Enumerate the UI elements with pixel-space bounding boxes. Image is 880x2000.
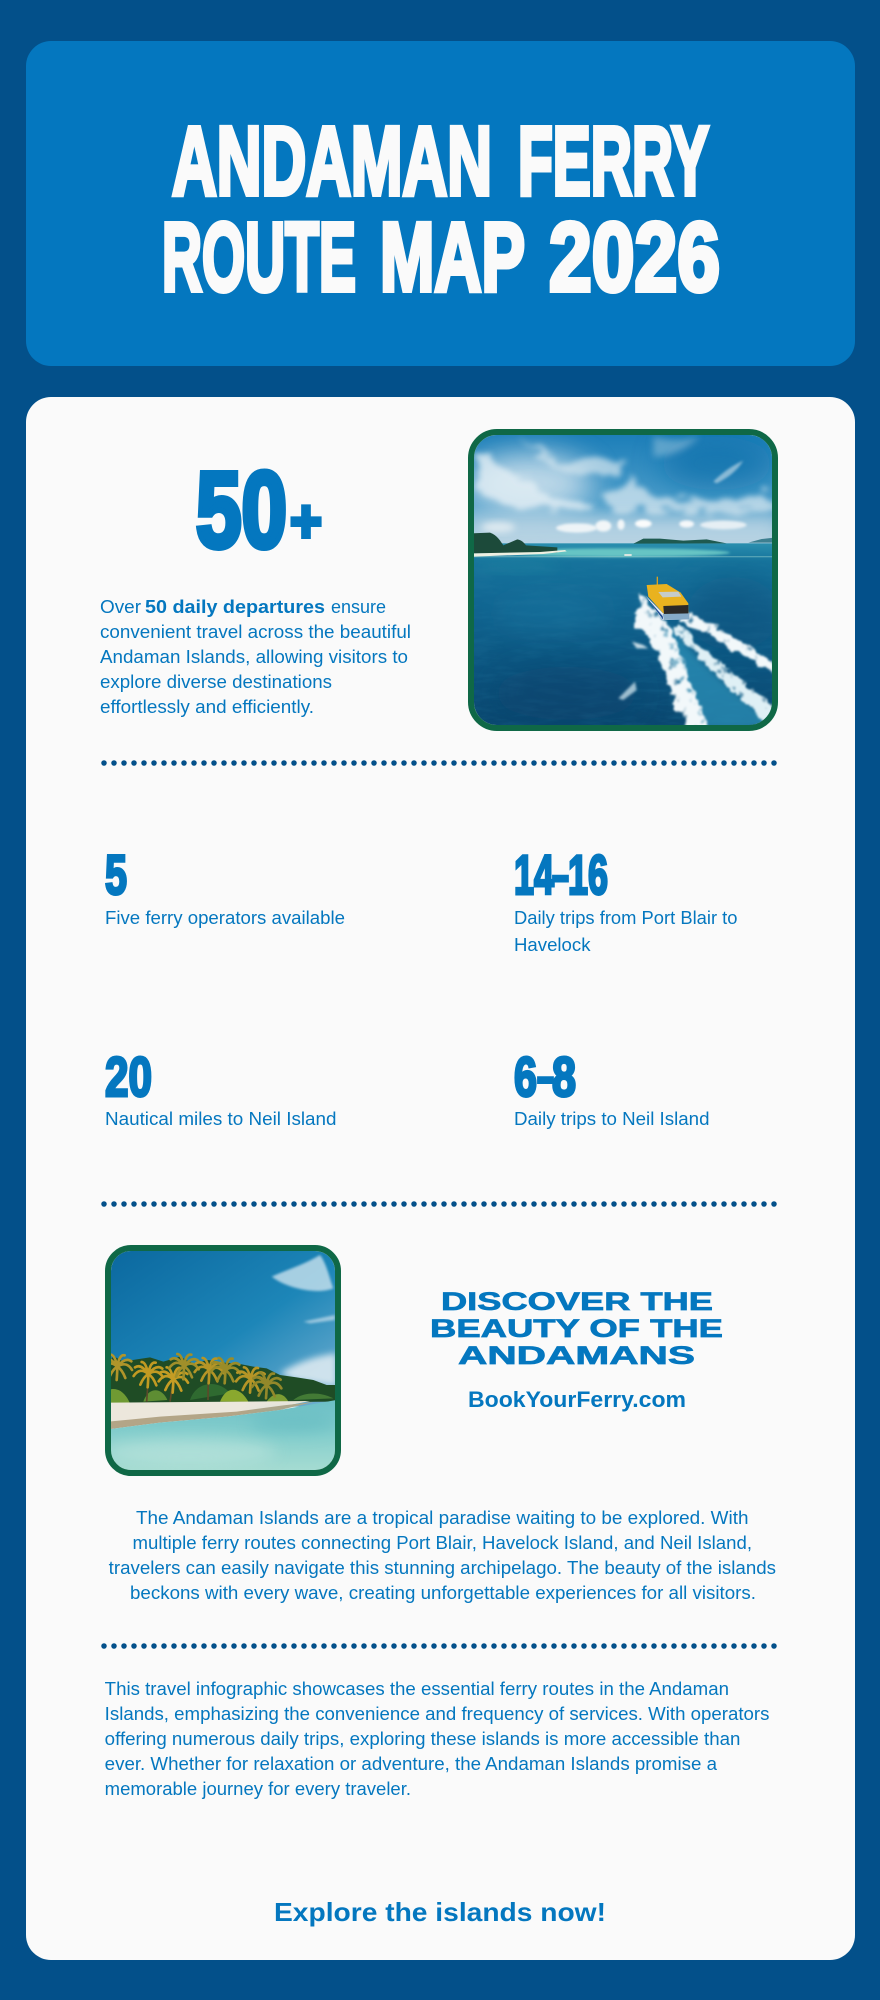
photo: palm beach bbox=[103, 1248, 338, 1473]
text block: daily departures bbox=[100, 597, 411, 717]
big stat: 50+: 50 bbox=[196, 449, 287, 570]
heading: discover the beauty: BEAUTY OF THE bbox=[430, 1315, 723, 1343]
call to action: Explore the islands now! bbox=[274, 1897, 606, 1927]
text block: summary: This travel infographic showcases the essential ferry routes in the Andaman bbox=[105, 1679, 729, 1699]
header banner bbox=[26, 41, 855, 366]
panel: main content card bbox=[26, 397, 855, 1960]
link text: BookYourFerry.com: BookYourFerry.com bbox=[468, 1387, 686, 1412]
text block: daily departures: 50 daily departures bbox=[145, 597, 325, 617]
text block: daily departures: Over bbox=[100, 597, 141, 617]
text block: daily departures: ensure bbox=[331, 597, 386, 617]
title bbox=[162, 106, 720, 312]
stat: ferry operators: Five ferry operators available bbox=[105, 908, 345, 928]
title: 2026 bbox=[549, 202, 720, 312]
heading: discover the beauty bbox=[430, 1288, 723, 1370]
text block: summary: offering numerous daily trips, exploring these islands is more accessible than bbox=[105, 1729, 740, 1749]
heading: discover the beauty: ANDAMANS bbox=[458, 1342, 695, 1370]
divider: dotted line bbox=[104, 1643, 775, 1649]
text block: tropical paradise: beckons with every wave, creating unforgettable experiences for all visitors. bbox=[130, 1583, 756, 1603]
heading: discover the beauty: DISCOVER THE bbox=[441, 1288, 713, 1316]
divider: dotted line bbox=[104, 760, 775, 766]
text block: summary: ever. Whether for relaxation or adventure, the Andaman Islands promise a bbox=[105, 1754, 718, 1774]
text block: daily departures: Andaman Islands, allowing visitors to bbox=[100, 647, 408, 667]
text block: summary bbox=[105, 1679, 770, 1799]
title: MAP bbox=[380, 202, 525, 312]
photo: ferry on the sea bbox=[467, 432, 780, 730]
stat: Neil Island trips bbox=[514, 1045, 710, 1129]
stat: Neil Island trips: Daily trips to Neil Island bbox=[514, 1109, 710, 1129]
text block: daily departures: convenient travel across the beautiful bbox=[100, 622, 411, 642]
stat: Port Blair to Havelock trips: Havelock bbox=[514, 935, 592, 955]
stat: Neil Island trips: 8 bbox=[552, 1045, 576, 1108]
stat: Neil Island trips: - bbox=[537, 1056, 554, 1100]
stat: ferry operators bbox=[105, 843, 345, 928]
text block: summary: memorable journey for every traveler. bbox=[105, 1779, 411, 1799]
stat: Port Blair to Havelock trips: - bbox=[552, 854, 569, 898]
stat: Neil Island trips: 6 bbox=[514, 1045, 537, 1108]
stat: Port Blair to Havelock trips: 14 bbox=[514, 843, 554, 906]
title: ANDAMAN bbox=[172, 106, 492, 216]
text block: daily departures: effortlessly and efficiently. bbox=[100, 697, 314, 717]
stat: nautical miles: 20 bbox=[105, 1045, 152, 1108]
stat: nautical miles: Nautical miles to Neil Island bbox=[105, 1109, 336, 1129]
text block: tropical paradise: travelers can easily navigate this stunning archipelago. The beauty of the islands bbox=[109, 1558, 776, 1578]
stat: Port Blair to Havelock trips bbox=[514, 843, 738, 955]
text block: tropical paradise: The Andaman Islands are a tropical paradise waiting to be explored. With bbox=[136, 1508, 748, 1528]
text block: daily departures: explore diverse destinations bbox=[100, 672, 332, 692]
text block: summary: Islands, emphasizing the convenience and frequency of services. With operators bbox=[105, 1704, 770, 1724]
divider: dotted line bbox=[104, 1201, 775, 1207]
title: FERRY bbox=[518, 106, 709, 216]
stat: nautical miles bbox=[105, 1045, 336, 1129]
text block: tropical paradise bbox=[109, 1508, 776, 1603]
text block: tropical paradise: multiple ferry routes connecting Port Blair, Havelock Island, and Neil Island, bbox=[132, 1533, 752, 1553]
stat: ferry operators: 5 bbox=[105, 843, 127, 906]
title: ROUTE bbox=[162, 202, 356, 312]
big stat: 50+: + bbox=[290, 488, 322, 555]
stat: Port Blair to Havelock trips: 16 bbox=[568, 843, 608, 906]
stat: Port Blair to Havelock trips: Daily trips from Port Blair to bbox=[514, 908, 738, 928]
